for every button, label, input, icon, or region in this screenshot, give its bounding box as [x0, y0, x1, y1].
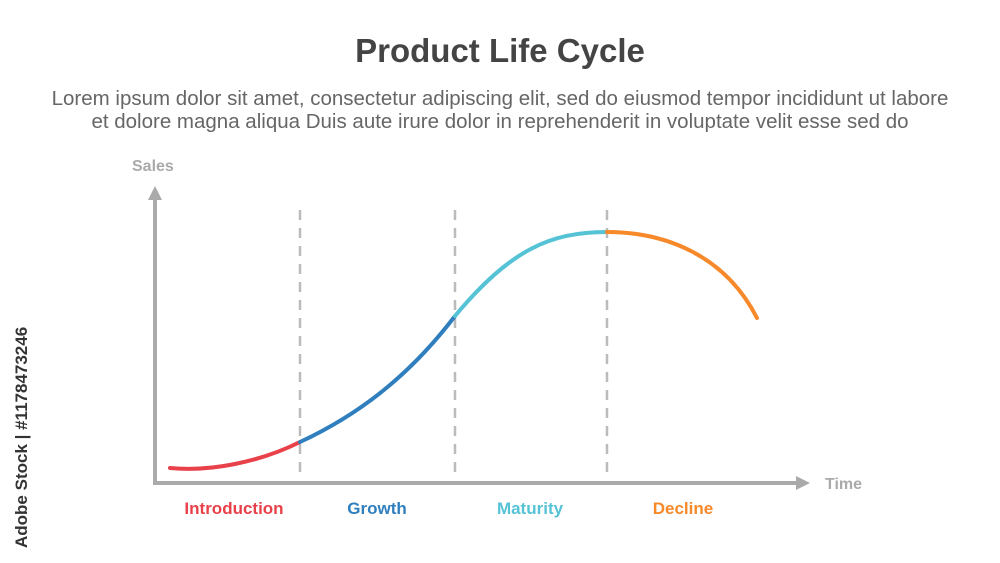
curve [170, 232, 757, 469]
axis labels: Sales [132, 158, 174, 175]
stage labels: Growth [347, 499, 407, 518]
axis labels: Time [825, 476, 862, 493]
stage labels: Maturity [497, 499, 564, 518]
dashed stage dividers [300, 210, 607, 472]
stage labels [184, 499, 713, 518]
subtitle text: et dolore magna aliqua Duis aute irure dolor in reprehenderit in voluptate velit esse sed do [91, 110, 909, 133]
stage labels: Decline [653, 499, 713, 518]
axis labels [132, 158, 862, 493]
title: Product Life Cycle [355, 32, 645, 69]
watermark side text: Adobe Stock | #1178473246 [12, 327, 31, 548]
stage labels: Introduction [184, 499, 284, 518]
subtitle text [52, 87, 948, 133]
axes [148, 186, 810, 490]
subtitle text: Lorem ipsum dolor sit amet, consectetur adipiscing elit, sed do eiusmod tempor incididunt ut labore [52, 87, 948, 110]
